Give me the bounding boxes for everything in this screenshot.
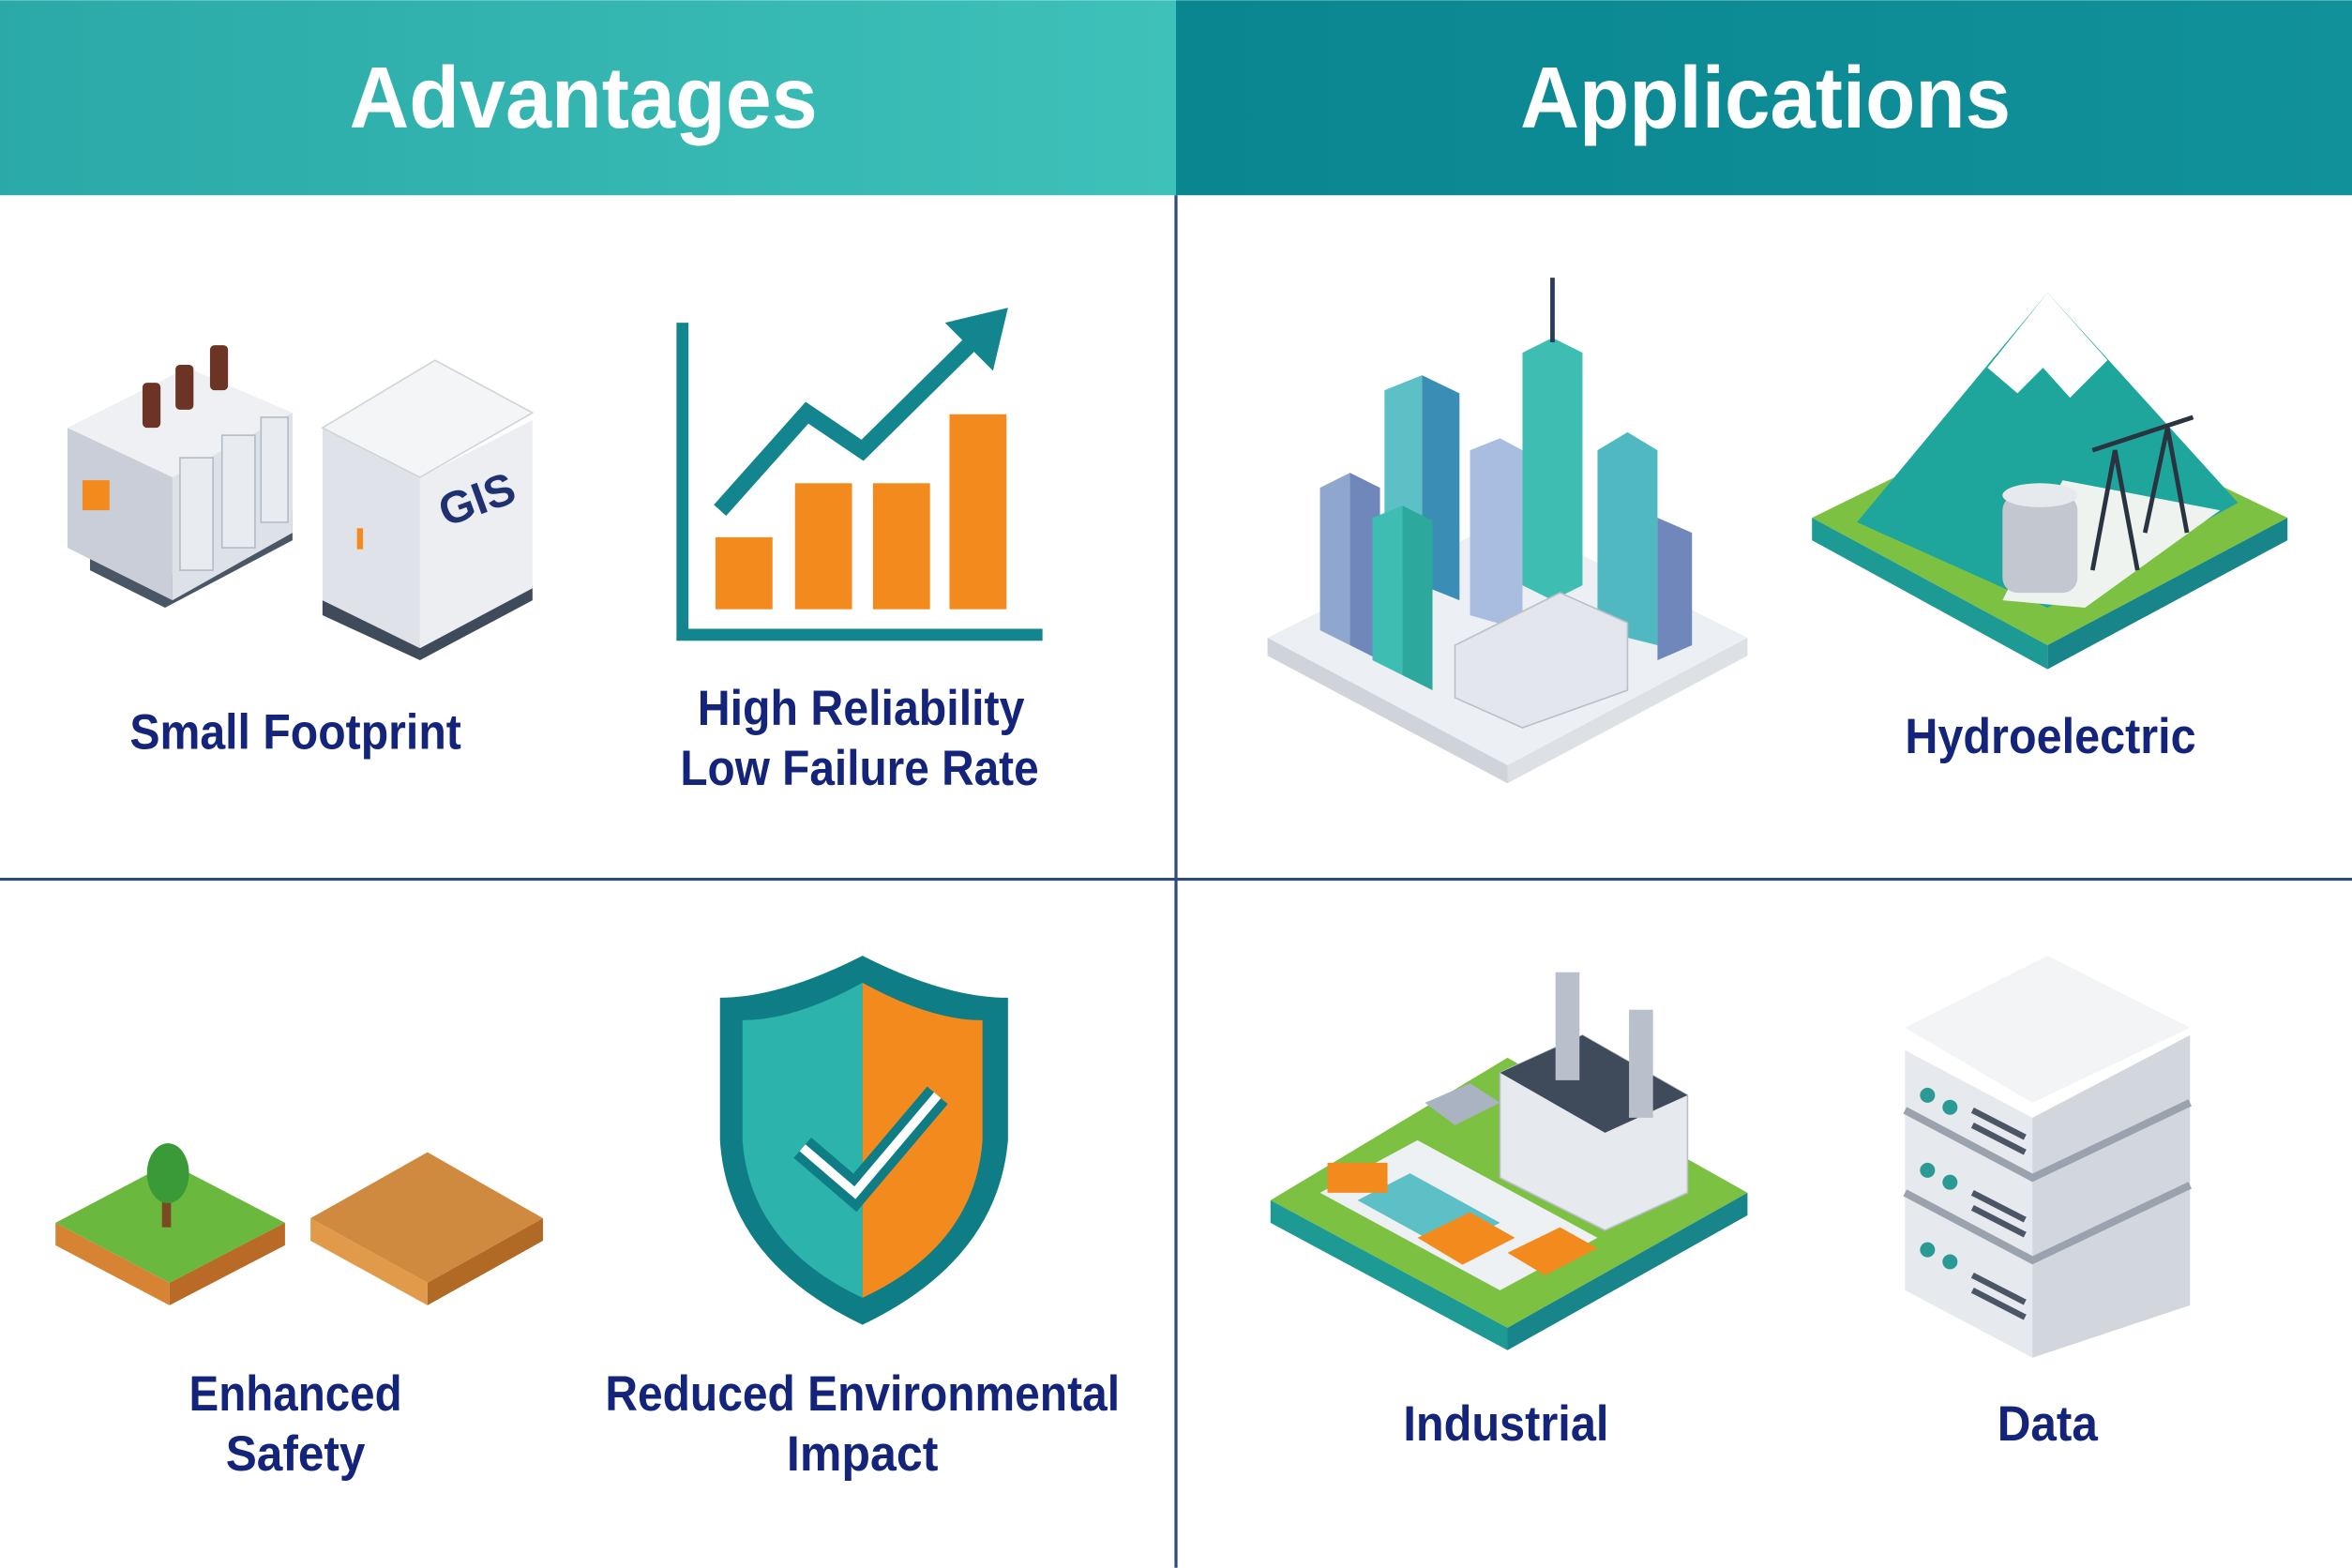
label: high reliability: High Reliability <box>698 681 1025 736</box>
icon: city <box>1268 278 1747 783</box>
icon: hydroelectric <box>1812 293 2287 670</box>
icon: GIS cabinet <box>323 360 533 660</box>
label: small footprint: Small Footprint <box>129 704 461 760</box>
text: Low Failure Rate <box>680 741 1039 796</box>
icon: ground tiles <box>55 1143 543 1305</box>
text: Impact <box>787 1426 938 1482</box>
icon: industrial <box>1271 972 1747 1350</box>
icon: shield <box>720 956 1008 1325</box>
label: enhanced safety: Enhanced <box>189 1366 402 1422</box>
header: advantages: Advantages <box>350 49 818 146</box>
header: applications: Applications <box>1520 49 2011 146</box>
label: hydroelectric: Hydroelectric <box>1905 709 2196 764</box>
header: applications <box>1176 0 2352 195</box>
icon: data server <box>1905 956 2190 1358</box>
icon: GIS cabinet: GIS <box>432 463 522 536</box>
label: reduced environmental impact: Reduced Environmental <box>605 1366 1120 1422</box>
chart: reliability <box>683 308 1043 635</box>
header: advantages <box>0 0 1176 195</box>
label: industrial: Industrial <box>1403 1396 1608 1452</box>
icon: transformer <box>68 345 293 608</box>
text: Safety <box>226 1426 366 1482</box>
label: data: Data <box>1998 1396 2098 1452</box>
